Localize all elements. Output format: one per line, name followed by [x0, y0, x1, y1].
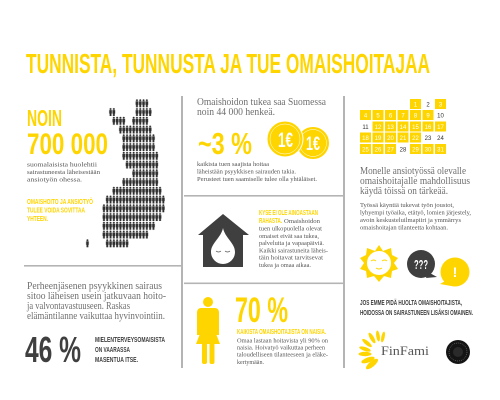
text: family illness paragraph: Perheenjäsenen psyykkinen sairaus: [27, 281, 162, 292]
big number: 46 percent: 46 %: [25, 329, 81, 370]
chart: calendar: 11: [362, 125, 369, 131]
text: women description: naisia. Hoivatyö vaikuttaa perheen: [237, 344, 326, 352]
chart: calendar: 1: [414, 102, 418, 108]
text: working heading: Monelle ansiotyössä olevalle: [360, 166, 466, 177]
text: family illness paragraph: sitoo läheisen usein jatkuvaan hoito-: [27, 291, 166, 302]
text: women description: taloudelliseen tilanteeseen ja eläke-: [237, 352, 328, 358]
chart: calendar: 17: [437, 125, 444, 131]
text: closing statement: [360, 298, 473, 317]
text: percent description: läheistään psyykkisen sairauden takia.: [197, 168, 296, 176]
big number: 3 percent: ~3 %: [198, 126, 252, 161]
chart: calendar: 31: [437, 148, 444, 154]
text: working heading: [360, 166, 470, 197]
text: not only money: omaiset eivät saa tukea,: [259, 233, 319, 240]
icon: question bubble: [407, 250, 437, 278]
heading: noin: NOIN: [27, 105, 62, 131]
chart: calendar: 28: [400, 148, 407, 154]
chart: calendar: 9: [426, 114, 430, 120]
text: not only money: Omaishoidon: [284, 218, 321, 225]
chart: calendar: 14: [400, 125, 407, 131]
chart: calendar: 29: [412, 148, 419, 154]
text: depression risk: MIELENTERVEYSOMAISISTA: [95, 335, 165, 344]
text: depression risk: ON VAARASSA: [95, 345, 130, 354]
text: not only money: Kaikki sairastuneita läheis-: [259, 248, 328, 254]
chart: calendar: 8: [414, 114, 418, 120]
text: family illness paragraph: elämäntilanne vaikuttaa hyvinvointiin.: [27, 311, 165, 322]
text: women description: Omaa lastaan hoitavista yli 90% on: [237, 338, 329, 344]
chart: calendar: 3: [439, 102, 443, 108]
callout: yellow statement: OMAISHOITO JA ANSIOTYÖ: [27, 197, 93, 206]
text: support intro: [197, 97, 326, 118]
text: working detail: lyhyempi työaika, etätyö, lomien järjestely,: [360, 210, 471, 216]
text: description: ansiotyön ohessa.: [27, 176, 82, 184]
chart: calendar: 19: [375, 136, 382, 142]
chart: calendar: 12: [375, 125, 382, 131]
panel: not only money: [198, 208, 328, 269]
chart: calendar: 23: [425, 136, 432, 142]
chart: calendar: 30: [425, 148, 432, 154]
big number: 70 percent: 70 %: [235, 291, 288, 330]
text: description: sairastuneesta läheisestään: [27, 169, 101, 176]
panel: 700 000 carers: [27, 99, 165, 248]
chart: calendar: 22: [412, 136, 419, 142]
text: working heading: käydä töissä on tärkeää.: [360, 186, 448, 197]
chart: Finland map of people: [86, 99, 165, 248]
panel: working carers: [360, 99, 471, 232]
chart: calendar: 7: [401, 114, 405, 120]
icon: coins: 1€: [278, 129, 293, 152]
logo: round badge: [446, 340, 470, 364]
text: not only money: tuen ulkopuolella olevat: [259, 226, 322, 232]
chart: calendar: 26: [375, 148, 382, 154]
chart: calendar: 5: [376, 114, 380, 120]
chart: calendar: 13: [387, 125, 394, 131]
panel: 44 000 recipients: [197, 97, 330, 183]
icon: exclamation bubble: [440, 258, 470, 286]
chart: calendar: 25: [362, 148, 369, 154]
callout: yellow statement: YHTEEN.: [27, 214, 48, 223]
text: percent description: Perusteet tuen saamiselle tulee olla yhtäläiset.: [197, 176, 317, 183]
text: percent description: kaikista tuen saajista hoitaa: [197, 161, 269, 168]
text: women description: [237, 327, 329, 366]
chart: calendar: 20: [387, 136, 394, 142]
chart: calendar: 6: [389, 114, 393, 120]
callout: yellow statement: TULEE VOIDA SOVITTAA: [27, 206, 85, 214]
text: working detail: [360, 202, 471, 232]
text: not only money: palveluita ja vapaapäiviä.: [259, 240, 324, 247]
text: percent description: [197, 161, 317, 183]
icon: smiling sun: [360, 245, 398, 282]
icon: woman: [196, 297, 220, 364]
chart: calendar: 21: [400, 136, 407, 142]
chart: calendar: 4: [364, 114, 368, 120]
callout: yellow statement: [27, 197, 93, 223]
text: not only money: RAHASTA.: [259, 216, 282, 225]
text: working detail: avoin keskusteluilmapiiri ja ymmärrys: [360, 217, 461, 224]
chart: calendar: 15: [412, 125, 419, 131]
chart: calendar: 2: [426, 102, 430, 108]
panel: family illness: [25, 281, 166, 370]
text: working heading: omaishoitajalle mahdollisuus: [360, 176, 470, 187]
logo: FinFami: FinFami: [381, 343, 429, 358]
text: family illness paragraph: ja valvontavastuuseen. Raskas: [26, 301, 130, 312]
chart: calendar: 10: [437, 114, 444, 120]
logo: FinFami: [358, 330, 429, 371]
chart: calendar: [360, 99, 446, 154]
text: working detail: omaishoitajan tilanteetta kohtaan.: [360, 224, 448, 232]
text: not only money: KYSE EI OLE AINOASTAAN: [259, 208, 318, 217]
text: working detail: Työssä käyntiä tukevat työn joustot,: [360, 202, 454, 209]
icon: coins: 1€: [306, 134, 320, 155]
text: depression risk: [95, 335, 165, 364]
text: description: suomalaisista huolehtii: [27, 162, 97, 168]
text: women description: KAIKISTA OMAISHOITAJISTA ON NAISIA.: [237, 327, 326, 336]
icon: coins: [267, 121, 330, 160]
panel: 70 percent women: [196, 291, 329, 366]
text: support intro: noin 44 000 henkeä.: [197, 107, 275, 118]
big number: 700 000: 700 000: [27, 128, 108, 161]
chart: calendar: 24: [437, 136, 444, 142]
text: support intro: Omaishoidon tukea saa Suomessa: [197, 97, 326, 108]
text: depression risk: MASENTUA ITSE.: [95, 355, 138, 364]
chart: calendar: 18: [362, 136, 369, 142]
text: not only money: tukea ja omaa aikaa.: [259, 262, 311, 269]
icon: exclamation bubble: !: [453, 264, 457, 280]
icon: question bubble: ???: [414, 257, 428, 272]
chart: calendar: 27: [387, 148, 394, 154]
panel dividers: [24, 96, 345, 368]
text: not only money: täin hoitavat tarvitsevat: [259, 254, 323, 262]
icon: house with drop: [198, 214, 249, 267]
text: description: [27, 162, 101, 184]
text: women description: kertymään.: [237, 359, 264, 366]
chart: calendar: 16: [425, 125, 432, 131]
text: not only money: [259, 208, 328, 269]
text: family illness paragraph: [26, 281, 166, 322]
